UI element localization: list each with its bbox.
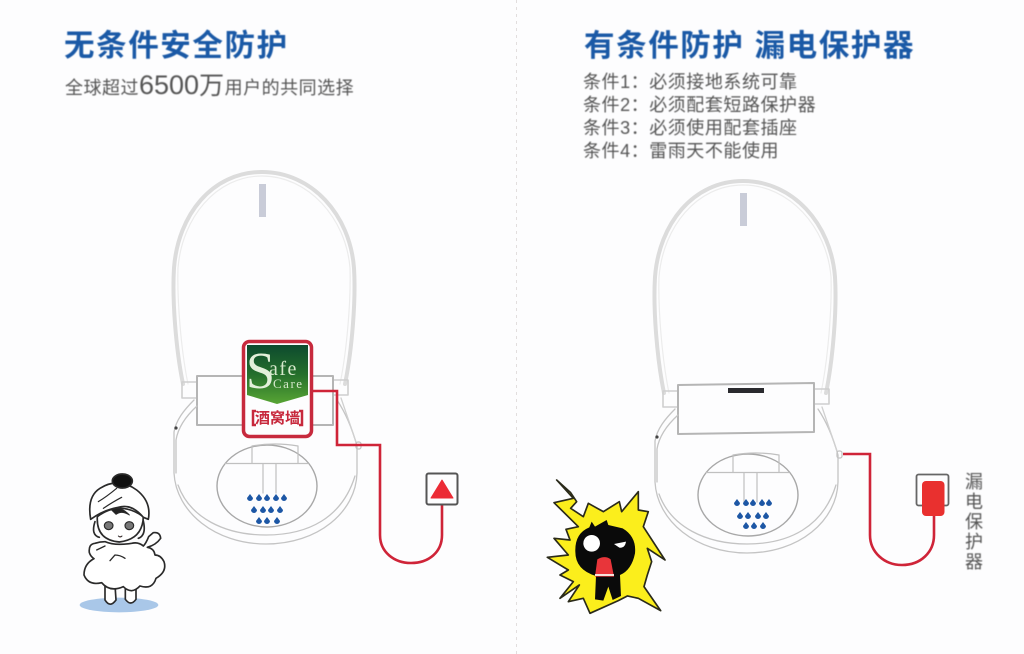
seat base: [655, 407, 842, 553]
title: left: 无条件安全防护: [64, 29, 289, 63]
face: [97, 508, 143, 542]
bowl oval: [698, 453, 798, 536]
subtitle: left: 全球超过6500万用户的共同选择: [65, 70, 354, 100]
lid: [654, 181, 836, 393]
conditions list: 条件3：必须使用配套插座: [583, 118, 798, 138]
lightning burst: [547, 480, 665, 613]
mouth: [595, 557, 614, 577]
character: electrocuted figure: [547, 480, 665, 613]
hinge unit: [182, 376, 348, 425]
conditions list: 条件1：必须接地系统可靠: [583, 72, 798, 92]
safe care wordmark: S: [246, 343, 275, 400]
safe care wordmark: Care: [273, 376, 304, 391]
legs: [105, 585, 136, 604]
character: girl in towel: [80, 474, 165, 612]
green shield: [247, 345, 308, 404]
hinge unit: [663, 383, 829, 434]
conditions list: [583, 72, 816, 161]
conditions list: 条件2：必须配套短路保护器: [583, 95, 816, 115]
badge: safe care: [244, 342, 312, 436]
bun: [112, 474, 132, 488]
towel: [90, 483, 149, 519]
lid: [173, 172, 355, 384]
eyes: [104, 522, 113, 530]
water drops: [734, 499, 772, 529]
head and body: [575, 520, 635, 601]
water drops: [247, 494, 287, 524]
body cloud: [84, 533, 165, 591]
toilet seat: right: [654, 181, 842, 553]
toilet seat: left: [173, 172, 361, 544]
shadow: [80, 598, 158, 612]
eyes: [583, 535, 600, 552]
hair sides: [94, 518, 144, 538]
bowl oval: [217, 444, 317, 527]
safe care wordmark: afe: [269, 358, 298, 380]
title: right: 有条件防护 漏电保护器: [584, 29, 915, 63]
vertical label: 漏电保护器: [965, 472, 983, 572]
socket: right with leakage protector plug: [916, 474, 948, 516]
socket: left: [426, 474, 458, 504]
cable: left: [312, 391, 442, 563]
conditions list: 条件4：雷雨天不能使用: [583, 141, 779, 161]
safe care wordmark: [246, 343, 304, 400]
seat base: [174, 398, 361, 544]
fringe: [112, 508, 129, 515]
cable: right: [843, 454, 934, 565]
red brand text: 酒窝墙: [255, 409, 300, 427]
